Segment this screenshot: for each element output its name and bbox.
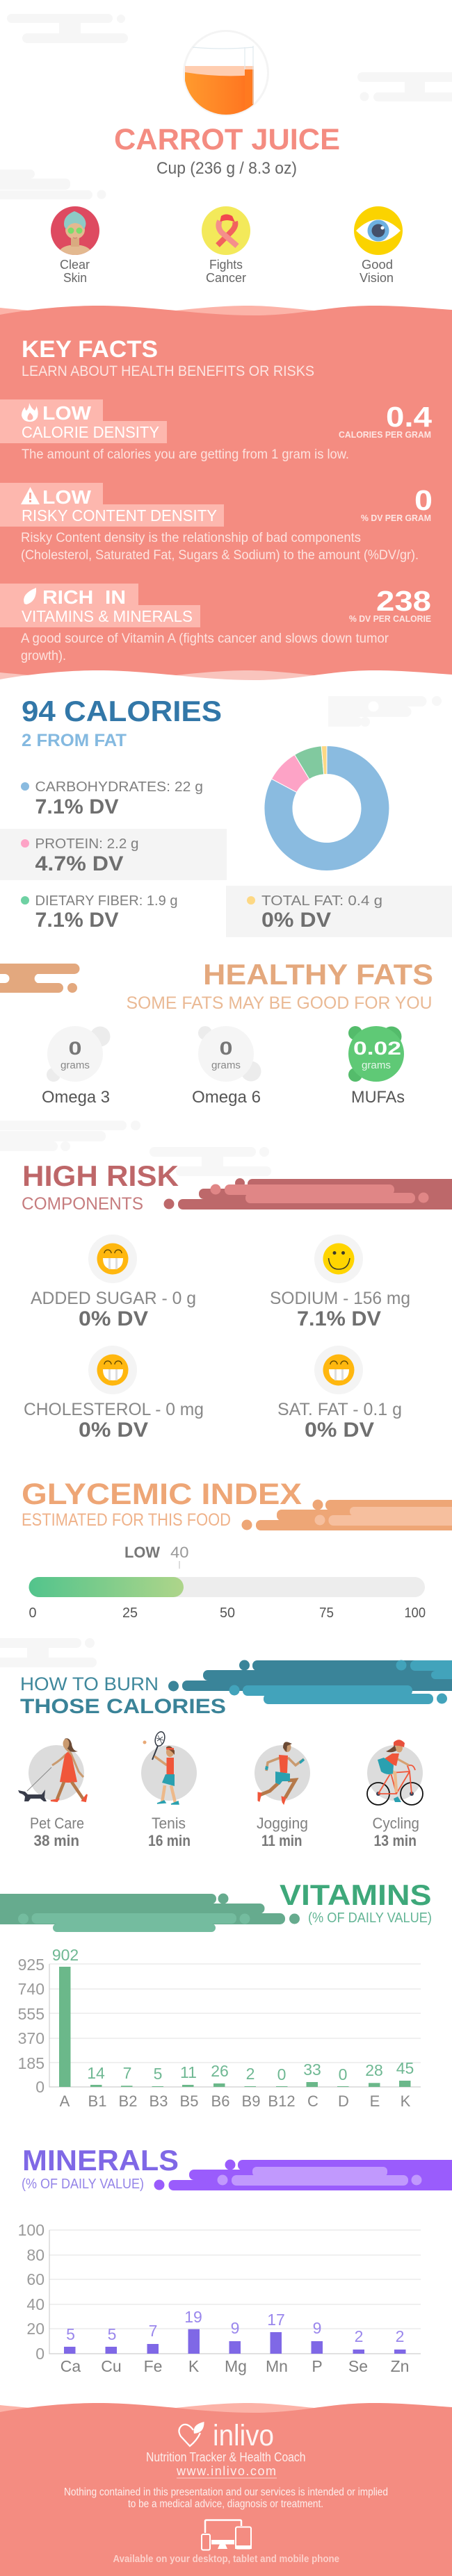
- bar chart: vitamins: 0: [339, 2065, 347, 2083]
- glycemic index gauge: 40: [170, 1544, 189, 1561]
- fat: omega 3: [42, 1026, 110, 1107]
- glycemic index gauge: 75: [319, 1605, 334, 1621]
- bar chart: vitamins: C: [307, 2092, 318, 2110]
- activity: jogging: [255, 1742, 310, 1849]
- bar chart: vitamins: B12: [268, 2092, 296, 2110]
- benefit: good vision: [354, 206, 403, 285]
- component: cholesterol: [24, 1346, 204, 1442]
- website: www.inlivo.com: [176, 2464, 276, 2478]
- component: cholesterol: 0% DV: [79, 1419, 148, 1442]
- fact: calorie density: LOW: [42, 402, 92, 424]
- legend: carbohydrates: 7.1% DV: [35, 795, 118, 818]
- bar chart: minerals: 80: [26, 2246, 45, 2264]
- subheading: healthy fats: SOME FATS MAY BE GOOD FOR YOU: [127, 993, 433, 1013]
- serving size: Cup (236 g / 8.3 oz): [156, 159, 297, 178]
- fat: omega 3: grams: [60, 1059, 90, 1071]
- logo: inlivo: inlivo: [213, 2419, 274, 2452]
- fact: calorie density: The amount of calories you are getting from 1 gram is low.: [22, 447, 349, 462]
- bar chart: vitamins: 33: [303, 2061, 321, 2079]
- bar chart: minerals: 7: [149, 2322, 157, 2340]
- fact: calorie density: CALORIES PER GRAM: [339, 429, 431, 440]
- heading: healthy fats: HEALTHY FATS: [203, 958, 433, 991]
- bar chart: minerals: 19: [184, 2308, 202, 2326]
- bar chart: vitamins: 2: [246, 2065, 255, 2083]
- component: added sugar: [31, 1235, 196, 1330]
- subheading: calories from fat: 2 FROM FAT: [22, 731, 127, 750]
- activity: tennis: Tenis: [152, 1815, 186, 1832]
- benefit: good vision: Good: [362, 258, 393, 272]
- fact: calorie density: CALORIE DENSITY: [22, 423, 159, 441]
- bar chart: minerals: Mn: [266, 2357, 288, 2375]
- benefit: clear skin: Clear: [60, 258, 90, 272]
- glycemic index gauge: 25: [122, 1605, 138, 1621]
- component: saturated fat: SAT. FAT - 0.1 g: [277, 1400, 402, 1419]
- logo: inlivo: [179, 2419, 274, 2452]
- bar chart: vitamins: K: [401, 2092, 411, 2110]
- fat: omega 6: Omega 6: [192, 1088, 261, 1107]
- activity: pet care: [18, 1738, 87, 1849]
- background cloud: burn: [0, 1638, 97, 1667]
- bar chart: vitamins: B6: [211, 2092, 229, 2110]
- bar chart: minerals: Mg: [225, 2357, 247, 2375]
- fat: MUFAs: MUFAs: [351, 1088, 405, 1107]
- bar chart: vitamins: B5: [180, 2092, 198, 2110]
- background clouds: high risk: [0, 1121, 271, 1176]
- fact: rich in vitamins and minerals: [0, 584, 431, 663]
- activity: tennis: [141, 1731, 197, 1849]
- panel: key facts: [0, 306, 452, 688]
- bar chart: minerals: P: [312, 2357, 323, 2375]
- fact: risky content density: (Cholesterol, Saturated Fat, Sugars & Sodium) to the amount (%DV/gr).: [21, 548, 419, 563]
- bar chart: vitamins: 185: [18, 2054, 45, 2072]
- background cloud: calories: [328, 696, 442, 727]
- fact: risky content density: 0: [414, 484, 433, 516]
- fat: MUFAs: grams: [362, 1059, 391, 1071]
- bar chart: vitamins: 555: [18, 2005, 45, 2023]
- decorative bars: high risk: [164, 1178, 452, 1209]
- component: added sugar: 0% DV: [79, 1307, 148, 1330]
- activity: tennis: 16 min: [148, 1832, 191, 1849]
- heading: glycemic index: GLYCEMIC INDEX: [22, 1478, 302, 1511]
- bar chart: minerals: 2: [396, 2327, 404, 2345]
- bar chart: vitamins: 26: [211, 2062, 229, 2080]
- title: CARROT JUICE: [114, 123, 340, 156]
- bar chart: minerals: 5: [66, 2325, 75, 2343]
- component: sodium: [270, 1235, 410, 1330]
- decorative bars: burn: [168, 1660, 452, 1704]
- fat: omega 6: grams: [211, 1059, 241, 1071]
- bar chart: vitamins: 0: [35, 2078, 45, 2096]
- bar chart: minerals: 40: [26, 2295, 45, 2313]
- bar chart: vitamins: 902: [52, 1946, 79, 1964]
- bar chart: vitamins: 28: [365, 2061, 383, 2079]
- benefit: fights cancer: Fights: [209, 258, 243, 272]
- product image: glass of carrot juice: [184, 31, 268, 115]
- component: sodium: 7.1% DV: [297, 1307, 381, 1330]
- legend: carbohydrates: CARBOHYDRATES: 22 g: [35, 779, 203, 795]
- benefit: fights cancer: Cancer: [206, 271, 246, 285]
- fact: risky content density: % DV PER GRAM: [361, 513, 431, 523]
- decorative bars: glycemic index: [242, 1499, 452, 1530]
- fact: calorie density: 0.4: [386, 401, 432, 433]
- component: sodium: SODIUM - 156 mg: [270, 1289, 410, 1308]
- decorative bars: minerals: [154, 2159, 452, 2190]
- bar chart: vitamins: 45: [396, 2059, 414, 2077]
- bar chart: vitamins: A: [60, 2092, 70, 2110]
- activity: cycling: Cycling: [373, 1815, 419, 1832]
- icon: devices: [202, 2520, 252, 2550]
- activity: jogging: Jogging: [257, 1815, 308, 1832]
- glycemic index gauge: 100: [405, 1605, 426, 1621]
- fact: rich in vitamins and minerals: 238: [376, 585, 431, 617]
- legend: dietary fiber: [21, 893, 178, 932]
- disclaimer: [64, 2486, 388, 2510]
- bar chart: minerals: 0: [35, 2345, 45, 2363]
- bar chart: vitamins: B9: [242, 2092, 260, 2110]
- legend: carbohydrates: [21, 779, 203, 818]
- heading: how to burn: HOW TO BURN: [20, 1674, 159, 1694]
- bar chart: minerals: 20: [26, 2320, 45, 2338]
- bar chart: minerals: 100: [18, 2221, 45, 2239]
- donut chart: macronutrients: [264, 745, 389, 871]
- fat: omega 6: 0: [220, 1038, 232, 1059]
- bar chart: minerals: Cu: [101, 2357, 122, 2375]
- benefit: good vision: Vision: [360, 271, 394, 285]
- activity: pet care: Pet Care: [30, 1815, 84, 1832]
- fact: risky content density: LOW: [42, 486, 92, 508]
- heading: those calories: THOSE CALORIES: [20, 1695, 226, 1718]
- bar chart: vitamins: 14: [87, 2064, 105, 2082]
- heading: high risk: HIGH RISK: [22, 1159, 179, 1192]
- activity: cycling: [367, 1740, 423, 1849]
- fact: calorie density: [0, 399, 432, 462]
- heading: minerals: MINERALS: [22, 2144, 179, 2177]
- fat: MUFAs: 0.02: [353, 1038, 401, 1059]
- legend: dietary fiber: DIETARY FIBER: 1.9 g: [35, 893, 178, 909]
- component: saturated fat: 0% DV: [305, 1419, 374, 1442]
- legend: protein: 4.7% DV: [35, 852, 124, 875]
- bar chart: vitamins: B3: [150, 2092, 168, 2110]
- benefit: clear skin: Skin: [63, 271, 87, 285]
- subheading: vitamins: (% OF DAILY VALUE): [308, 1910, 432, 1926]
- background clouds: header: [0, 14, 452, 199]
- fat: omega 3: Omega 3: [42, 1088, 110, 1107]
- bar chart: vitamins: B1: [88, 2092, 106, 2110]
- bar chart: vitamins: 11: [180, 2063, 197, 2081]
- fact: risky content density: RISKY CONTENT DENSITY: [22, 506, 217, 525]
- heading: key facts: KEY FACTS: [22, 336, 158, 363]
- subheading: components: COMPONENTS: [22, 1194, 143, 1214]
- activity: pet care: 38 min: [33, 1832, 79, 1849]
- decorative bar: healthy fats: [0, 964, 80, 993]
- heading: calories: 94 CALORIES: [22, 695, 222, 727]
- glycemic index gauge: LOW: [124, 1544, 160, 1561]
- tagline: Nutrition Tracker & Health Coach: [146, 2450, 306, 2464]
- subheading: minerals: (% OF DAILY VALUE): [22, 2177, 144, 2192]
- bar chart: minerals: 17: [267, 2311, 285, 2329]
- fact: rich in vitamins and minerals: VITAMINS & MINERALS: [22, 607, 193, 625]
- bar chart: vitamins: 0: [277, 2065, 286, 2083]
- bar chart: minerals: Se: [348, 2357, 368, 2375]
- bar chart: minerals: [18, 2221, 421, 2375]
- bar chart: minerals: 2: [355, 2327, 363, 2345]
- bar chart: vitamins: D: [338, 2092, 349, 2110]
- bar chart: minerals: Fe: [144, 2357, 162, 2375]
- bar chart: minerals: Ca: [60, 2357, 81, 2375]
- legend: protein: PROTEIN: 2.2 g: [35, 836, 139, 852]
- component: added sugar: ADDED SUGAR - 0 g: [31, 1289, 196, 1308]
- glycemic index gauge: 50: [220, 1605, 235, 1621]
- bar chart: vitamins: E: [370, 2092, 380, 2110]
- fat: omega 6: [192, 1026, 261, 1107]
- legend: protein: [0, 829, 227, 880]
- glycemic index gauge: [29, 1544, 426, 1621]
- legend: total fat: [226, 886, 452, 937]
- legend: total fat: TOTAL FAT: 0.4 g: [261, 893, 382, 909]
- subheading: LEARN ABOUT HEALTH BENEFITS OR RISKS: [22, 363, 314, 379]
- bar chart: minerals: 5: [108, 2325, 116, 2343]
- legend: total fat: 0% DV: [261, 909, 331, 932]
- fat: MUFAs: [348, 1026, 405, 1107]
- activity: cycling: 13 min: [374, 1832, 417, 1849]
- fact: risky content density: [0, 483, 433, 563]
- subheading: glycemic index: ESTIMATED FOR THIS FOOD: [22, 1510, 231, 1530]
- fact: rich in vitamins and minerals: growth).: [21, 649, 66, 663]
- bar chart: minerals: Zn: [391, 2357, 409, 2375]
- bar chart: vitamins: 7: [123, 2064, 131, 2082]
- heading: vitamins: VITAMINS: [280, 1879, 431, 1911]
- fact: rich in vitamins and minerals: A good source of Vitamin A (fights cancer and slows down tumor: [21, 631, 389, 646]
- bar chart: minerals: 60: [26, 2270, 45, 2288]
- bar chart: vitamins: 740: [18, 1980, 45, 1998]
- disclaimer: to be a medical advice, diagnosis or treatment.: [128, 2498, 323, 2510]
- legend: dietary fiber: 7.1% DV: [35, 909, 118, 932]
- fact: risky content density: Risky Content density is the relationship of bad components: [21, 531, 361, 545]
- bar chart: minerals: 9: [231, 2319, 239, 2337]
- availability note: Available on your desktop, tablet and mobile phone: [113, 2553, 339, 2565]
- benefit: fights cancer: [202, 206, 250, 285]
- bar chart: vitamins: 5: [154, 2065, 162, 2083]
- disclaimer: Nothing contained in this presentation and our services is intended or implied: [64, 2486, 388, 2498]
- bar chart: vitamins: B2: [119, 2092, 137, 2110]
- component: saturated fat: [277, 1346, 402, 1442]
- fact: rich in vitamins and minerals: RICH IN: [42, 586, 126, 608]
- panel: footer: [0, 2403, 452, 2576]
- benefit: clear skin: [51, 206, 99, 285]
- bar chart: minerals: 9: [313, 2319, 321, 2337]
- decorative bars: vitamins: [0, 1894, 300, 1932]
- bar chart: vitamins: 925: [18, 1956, 45, 1974]
- activity: jogging: 11 min: [261, 1832, 302, 1849]
- bar chart: vitamins: [18, 1946, 421, 2110]
- glycemic index gauge: 0: [29, 1605, 36, 1621]
- component: cholesterol: CHOLESTEROL - 0 mg: [24, 1400, 204, 1419]
- bar chart: vitamins: 370: [18, 2029, 45, 2047]
- fat: omega 3: 0: [68, 1038, 82, 1059]
- bar chart: minerals: K: [188, 2357, 200, 2375]
- fact: rich in vitamins and minerals: % DV PER CALORIE: [349, 613, 431, 624]
